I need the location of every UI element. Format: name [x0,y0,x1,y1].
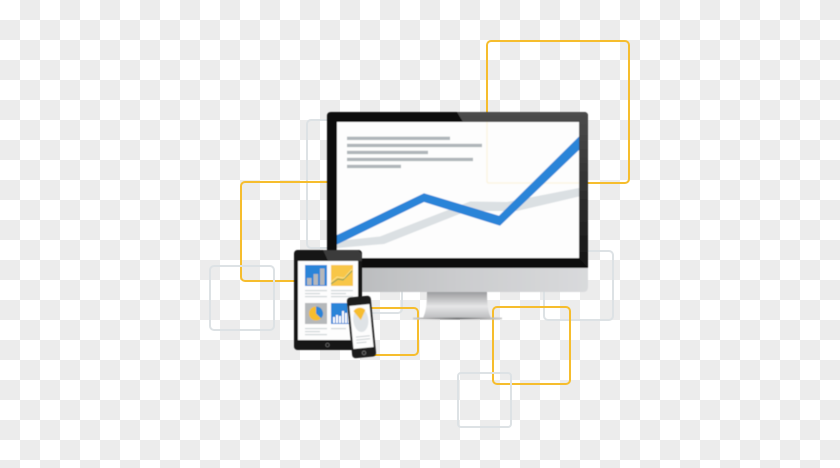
phone body [347,295,376,359]
tablet [294,250,362,350]
blue trend line [337,136,579,244]
gray trend line [337,188,579,248]
monitor [327,112,588,320]
phone text lines [356,335,370,344]
yellow square: left [241,182,351,281]
gray square: far left [210,266,274,330]
gray square: below monitor left [335,250,402,313]
text lines on screen [347,137,482,168]
tablet gloss [323,250,362,261]
faint square seen through the screen [487,122,579,183]
tablet home button [326,343,329,347]
tablet icon: blue column chart [331,303,353,324]
yellow square: small by phone [365,308,418,355]
phone screen [349,304,373,349]
tablet icon: pie chart [305,303,327,324]
tablet text lines bottom [305,328,346,335]
yellow square: top right [487,41,629,183]
tablet icon: line chart [331,265,353,286]
phone home button [362,351,366,355]
monitor screen [337,122,579,258]
phone pie chart [352,307,369,333]
tablet screen [298,261,358,340]
tablet icon: bar chart [305,265,327,286]
outlined squares behind the devices [210,41,629,427]
yellow square: lower right [493,307,570,384]
tablet text lines top [305,290,353,297]
gray square: right [544,251,613,320]
gray square: behind monitor left [307,120,367,248]
monitor chin [327,266,588,292]
phone [347,295,376,359]
monitor bezel [327,112,588,268]
gray square: bottom [458,373,511,427]
tablet body [294,250,362,350]
monitor stand [413,292,502,320]
